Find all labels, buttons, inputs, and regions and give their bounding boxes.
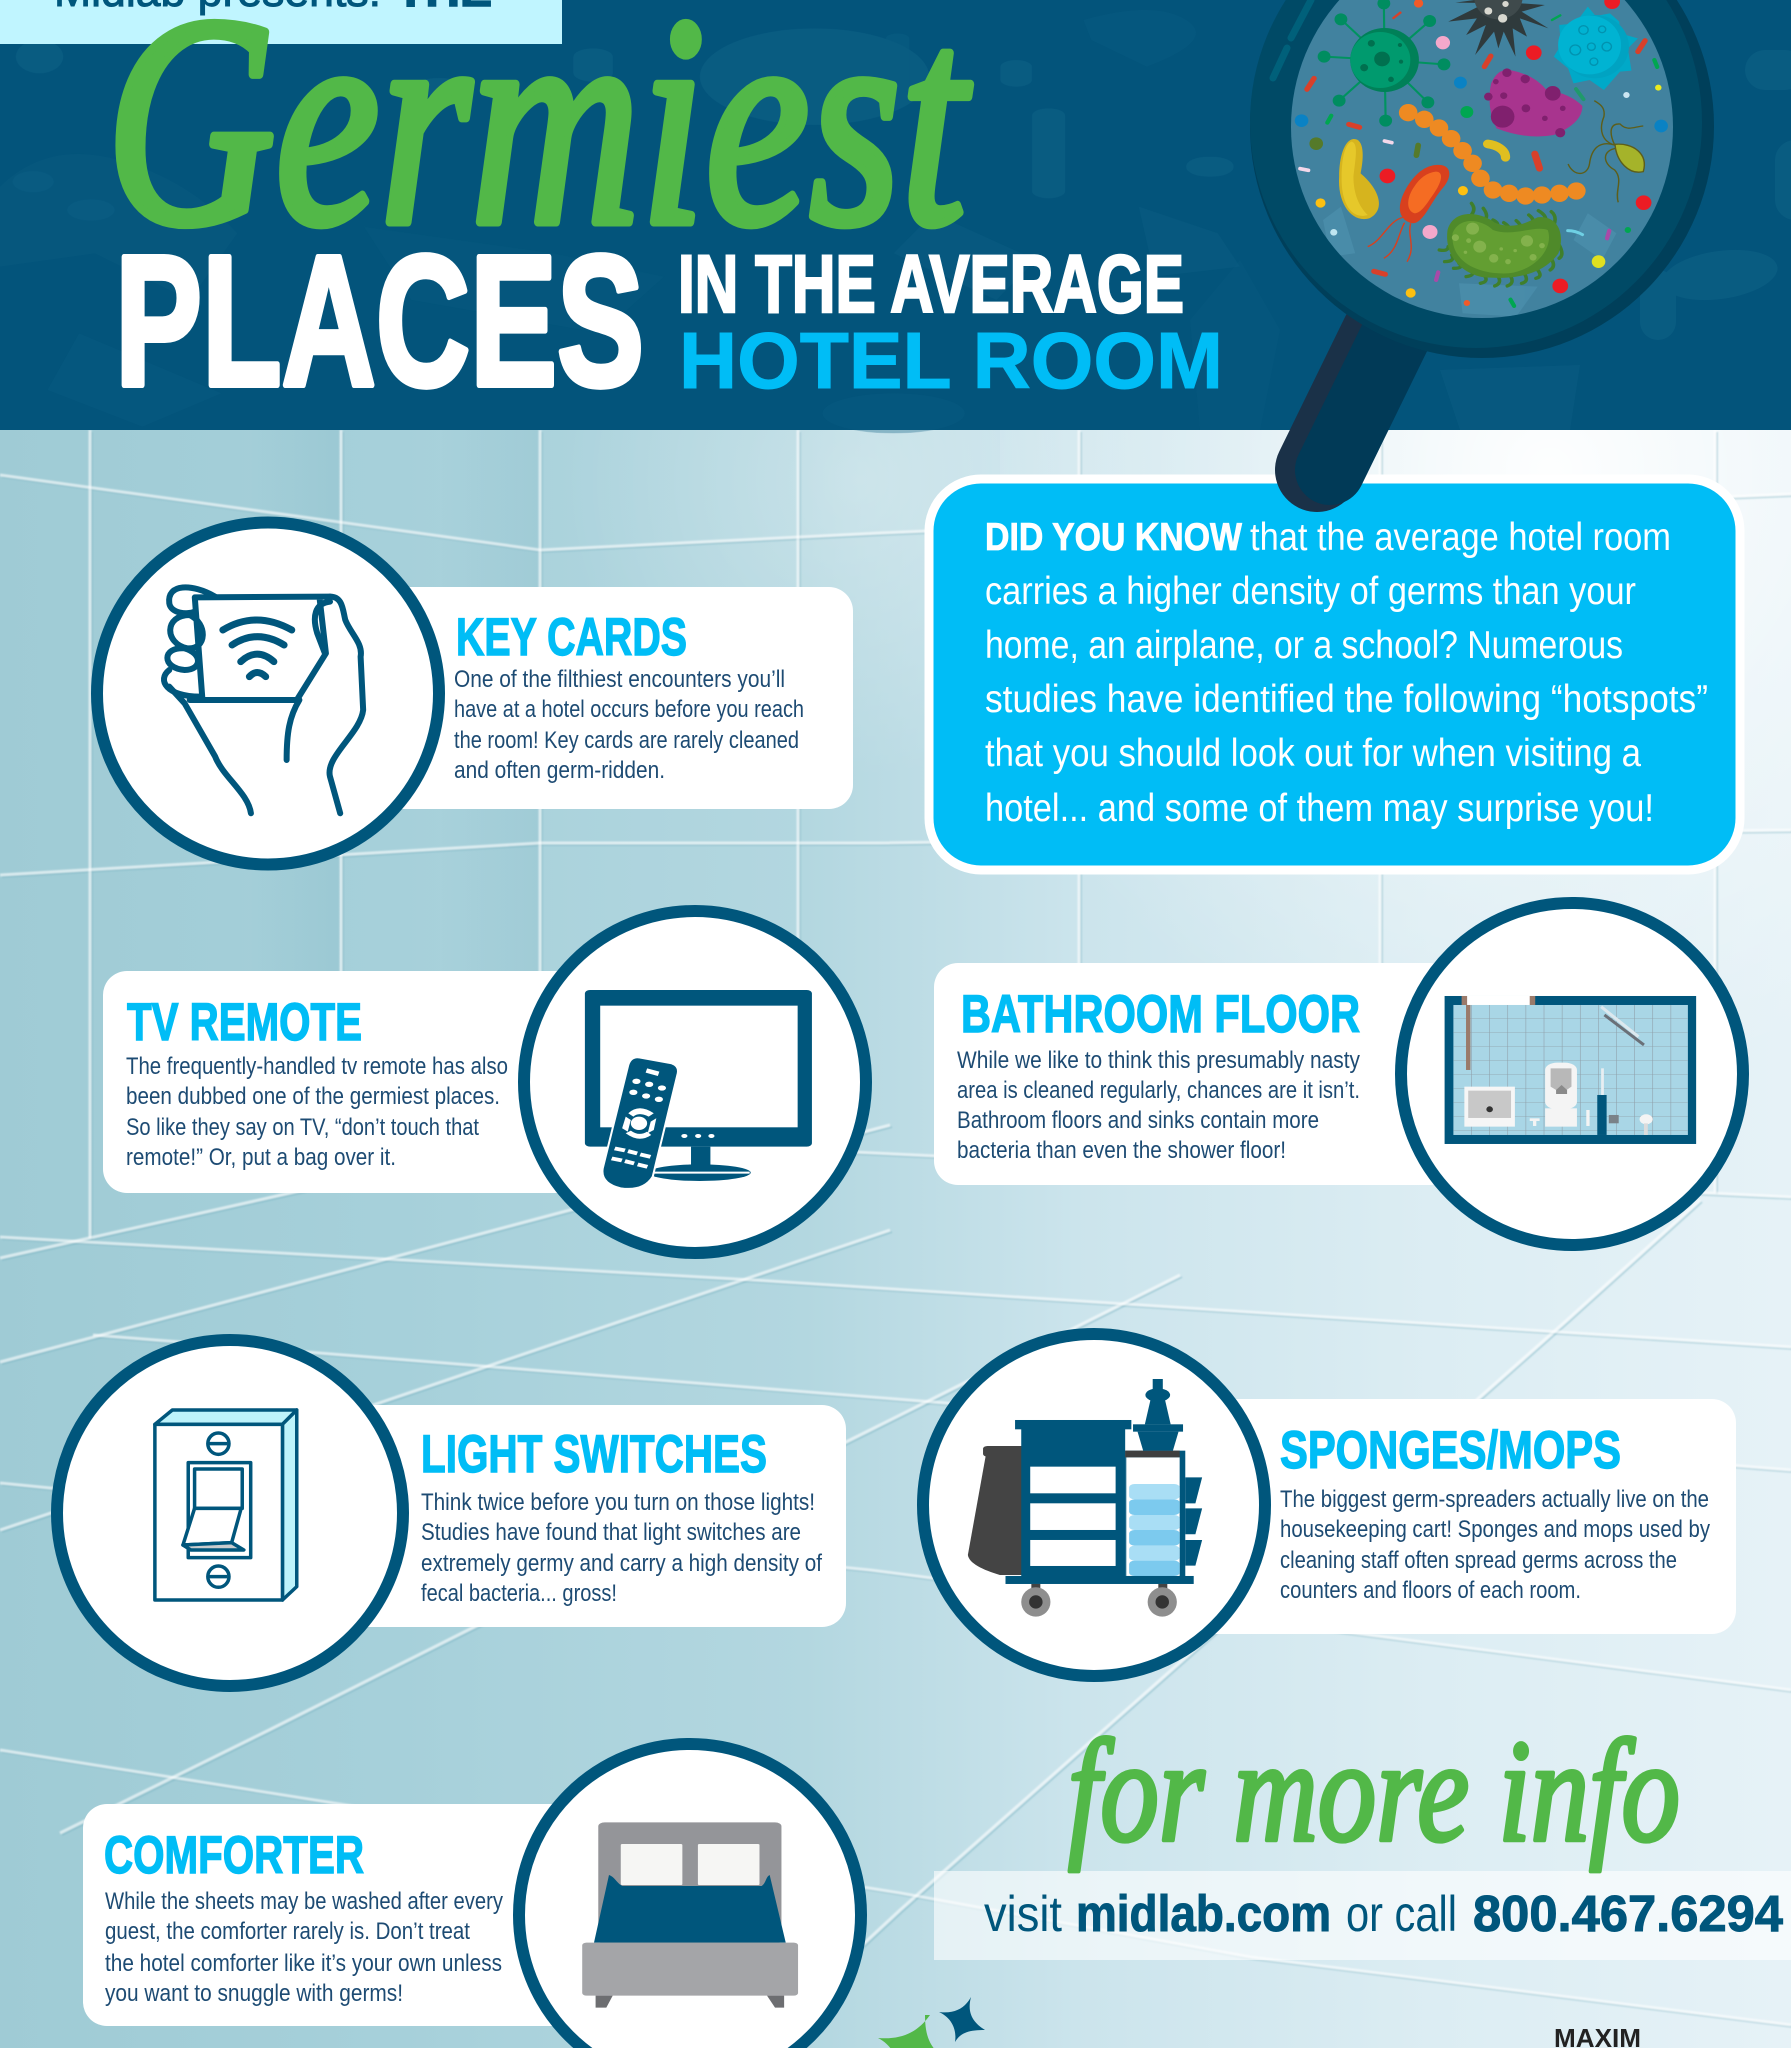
text: light switches: Studies have found that light switches are <box>421 1519 801 1546</box>
text: tv remote: The frequently-handled tv remote has also <box>126 1053 508 1080</box>
text: tv remote <box>126 1053 508 1171</box>
icon: bed <box>582 1822 798 2008</box>
text: key cards: the room! Key cards are rarely cleaned <box>454 727 799 754</box>
text: comforter: you want to snuggle with germs! <box>105 1980 403 2007</box>
background: tiled bathroom wall and floor <box>0 430 1791 2048</box>
icon: housekeeping cart <box>968 1379 1202 1617</box>
germ specks <box>1295 0 1668 306</box>
magnifying glass with germs <box>1250 0 1714 470</box>
title: HOTEL ROOM <box>679 316 1223 405</box>
title: PLACES <box>115 218 644 425</box>
panel: comforter <box>83 1744 861 2048</box>
heading: tv remote: TV REMOTE <box>127 993 362 1052</box>
text: light switches: extremely germy and carry a high density of <box>421 1550 822 1577</box>
top label strip <box>0 0 562 44</box>
text: bathroom floor: area is cleaned regularly, chances are it isn’t. <box>957 1077 1360 1104</box>
germ: black spiked <box>1448 0 1548 57</box>
text: comforter <box>105 1888 503 2007</box>
text: light switches: fecal bacteria... gross! <box>421 1580 617 1607</box>
text: sponges and mops: housekeeping cart! Sponges and mops used by <box>1280 1516 1710 1543</box>
panel: bathroom floor <box>934 903 1743 1245</box>
contact strip: visit <box>984 1886 1062 1942</box>
text: comforter: While the sheets may be washed after every <box>105 1888 503 1915</box>
germ: red bacterium <box>1368 165 1449 262</box>
text: comforter: guest, the comforter rarely is. Don’t treat <box>105 1918 470 1945</box>
callout: did you know: that you should look out for when visiting a <box>985 732 1641 775</box>
callout: did you know: studies have identified the following “hotspots” <box>985 678 1708 721</box>
magnifier ring <box>1250 0 1714 358</box>
panel: tv remote <box>103 911 866 1253</box>
contact strip: midlab.com <box>1076 1885 1331 1942</box>
callout: did you know: that the average hotel room <box>1250 516 1671 559</box>
contact strip <box>934 1871 1791 1960</box>
icon: tv and remote <box>585 990 812 1189</box>
text: key cards: and often germ-ridden. <box>454 757 665 784</box>
text: key cards: have at a hotel occurs before you reach <box>454 696 804 723</box>
panel: light switches <box>57 1340 846 1686</box>
germ: yellow kidney <box>1339 139 1506 219</box>
germ: green caterpillar <box>1439 203 1562 286</box>
callout: did you know: carries a higher density of germs than your <box>985 570 1636 613</box>
heading: key cards: KEY CARDS <box>456 608 687 667</box>
callout: did you know <box>929 479 1740 870</box>
callout: did you know: home, an airplane, or a school? Numerous <box>985 624 1623 667</box>
text: key cards <box>454 666 804 784</box>
panel: sponges and mops <box>923 1334 1736 1676</box>
text: tv remote: remote!” Or, put a bag over it. <box>126 1144 396 1171</box>
contact strip: 800.467.6294 <box>1473 1885 1784 1942</box>
header band <box>0 0 1791 433</box>
text: light switches: Think twice before you turn on those lights! <box>421 1489 815 1516</box>
text: bathroom floor: bacteria than even the shower floor! <box>957 1137 1286 1164</box>
icon: bathroom floor plan <box>1445 996 1696 1144</box>
text: key cards: One of the filthiest encounters you’ll <box>454 666 785 693</box>
icon: light switch <box>155 1410 297 1600</box>
text: sponges and mops <box>1280 1486 1710 1604</box>
magnifier handle <box>1317 335 1396 470</box>
panel: key cards <box>97 522 853 864</box>
germ: teal virus <box>1554 7 1638 90</box>
text: bathroom floor: Bathroom floors and sinks contain more <box>957 1107 1319 1134</box>
germs under the glass <box>1295 0 1668 317</box>
header germ pattern <box>0 10 1240 433</box>
germ: green virus <box>1318 0 1450 127</box>
callout: did you know: DID YOU KNOW <box>985 516 1242 559</box>
heading: light switches: LIGHT SWITCHES <box>421 1425 767 1484</box>
text: bathroom floor <box>957 1047 1360 1164</box>
heading: sponges and mops: SPONGES/MOPS <box>1280 1421 1621 1480</box>
title <box>106 0 1223 425</box>
text: sponges and mops: counters and floors of each room. <box>1280 1577 1581 1604</box>
heading: comforter: COMFORTER <box>104 1826 364 1885</box>
title: IN THE AVERAGE <box>678 239 1184 330</box>
text: comforter: the hotel comforter like it’s your own unless <box>105 1950 502 1977</box>
text: sponges and mops: cleaning staff often spread germs across the <box>1280 1547 1677 1574</box>
text: tv remote: So like they say on TV, “don’t touch that <box>126 1114 479 1141</box>
germ: orange chain <box>1399 104 1586 205</box>
text: light switches <box>421 1489 822 1607</box>
callout: did you know: hotel... and some of them may surprise you! <box>985 787 1654 830</box>
icon: hand holding key card <box>164 587 363 813</box>
germ: flagellate protozoan <box>1568 101 1644 202</box>
icon: sparkles <box>878 1997 985 2048</box>
contact strip: or call <box>1346 1886 1457 1942</box>
heading: bathroom floor: BATHROOM FLOOR <box>961 985 1360 1044</box>
text: bathroom floor: While we like to think this presumably nasty <box>957 1047 1360 1074</box>
germ: purple blob <box>1484 68 1582 137</box>
text: sponges and mops: The biggest germ-spreaders actually live on the <box>1280 1486 1709 1513</box>
text: tv remote: been dubbed one of the germiest places. <box>126 1083 500 1110</box>
